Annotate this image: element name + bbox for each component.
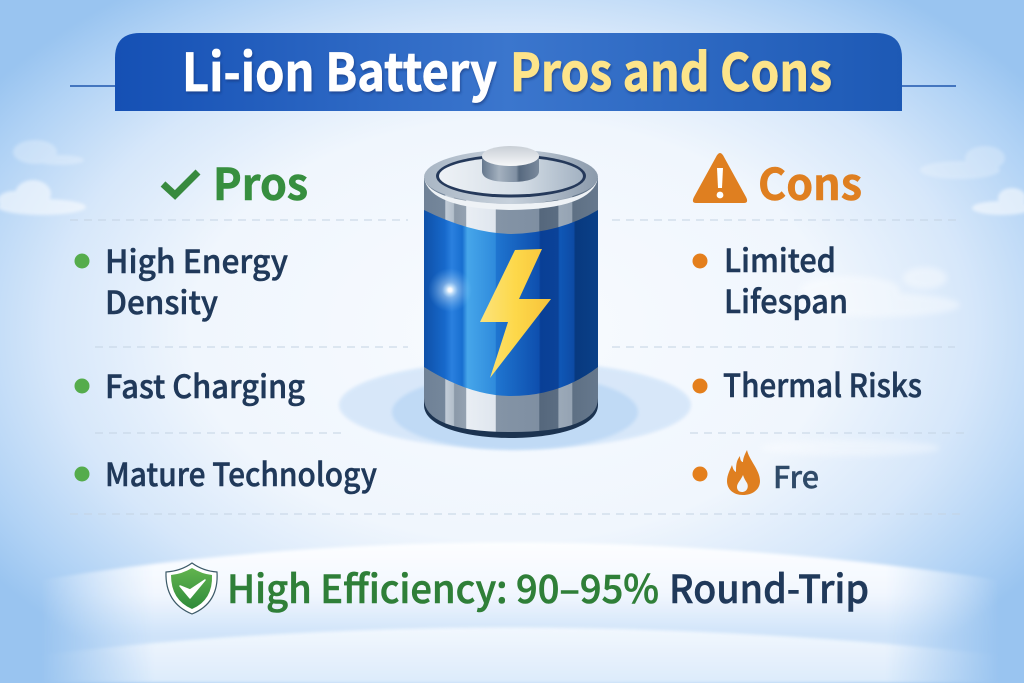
icon: flame <box>727 450 760 495</box>
title banner <box>70 31 956 111</box>
battery terminal <box>482 146 539 182</box>
battery body <box>424 178 598 438</box>
bullet: fire <box>692 450 819 497</box>
dashed dividers <box>70 220 965 514</box>
title text: Li-ion Battery <box>182 31 497 106</box>
bullet: thermal risks: Thermal Risks <box>723 361 922 407</box>
pros heading: Pros <box>213 149 308 213</box>
callout text: High Efficiency: 90–95% <box>227 559 659 615</box>
icon: warning triangle <box>693 153 747 203</box>
battery shadow <box>339 361 691 450</box>
sparkle <box>428 268 472 312</box>
bullet: limited lifespan: Limited <box>724 236 836 282</box>
bullet: fast charging: Fast Charging <box>105 362 305 408</box>
icon: check mark <box>163 172 198 195</box>
bullet: high energy density: High Energy <box>105 237 288 283</box>
bullet: limited lifespan <box>692 236 848 323</box>
clouds <box>0 140 1024 456</box>
cons heading: Cons <box>758 149 862 213</box>
bullet: mature technology: Mature Technology <box>105 450 377 496</box>
callout: high efficiency: Round-Trip <box>669 559 869 615</box>
lightning bolt <box>480 249 551 378</box>
panel: cons <box>692 149 922 497</box>
icon: shield <box>166 563 217 614</box>
battery illustration <box>339 146 691 450</box>
bullet: high energy density <box>74 237 288 324</box>
panel: pros <box>74 149 377 496</box>
bullet: high energy density: Density <box>105 278 218 324</box>
bottom band <box>40 542 1000 683</box>
callout: high efficiency <box>166 559 869 615</box>
bullet: limited lifespan: Lifespan <box>724 277 848 323</box>
bullet: fire: Fre <box>773 453 819 497</box>
title text: Pros and Cons <box>510 31 832 106</box>
battery top <box>424 150 598 210</box>
